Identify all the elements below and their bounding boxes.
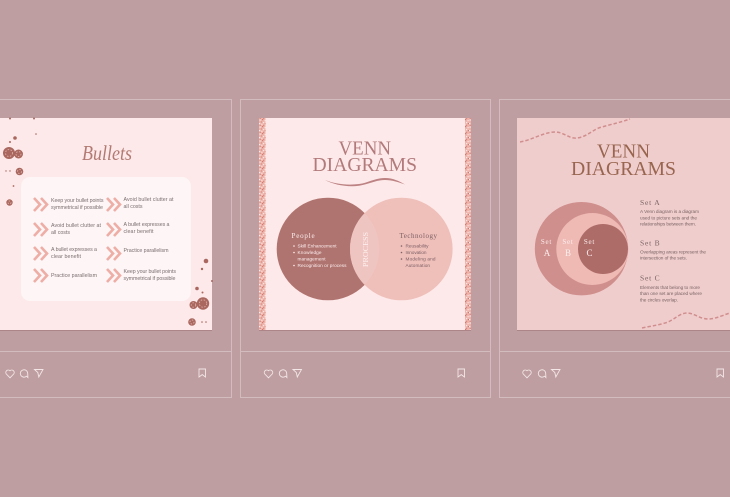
- label: Technology: Reusability: [406, 244, 429, 248]
- venn right circle: [350, 198, 453, 300]
- set B circle: [556, 213, 628, 285]
- bullet text column 2: Keep your bullet points: [124, 269, 176, 275]
- label: People: Skill Enhancement: [298, 244, 337, 248]
- set labels in circles: B: [565, 248, 571, 258]
- post frame: bullets: [0, 100, 232, 398]
- bullet text column 2: all costs: [124, 204, 143, 210]
- text: Set C: than one set are placed where: [640, 291, 702, 296]
- text: Set B: intersection of the sets.: [640, 256, 687, 260]
- glitter splatter bottom right: [188, 259, 213, 326]
- text: Set B: Set B: [640, 238, 660, 248]
- set labels in circles: Set: [562, 238, 574, 246]
- bullet text column 2: Practice parallelism: [124, 248, 169, 254]
- text: Set C: Elements that belong to more: [640, 285, 700, 290]
- bullet text column 1: A bullet expresses a: [51, 247, 97, 253]
- label: PROCESS: PROCESS: [361, 232, 370, 267]
- text: Set A: A Venn diagram is a diagram: [640, 209, 699, 214]
- set labels in circles: A: [544, 248, 551, 258]
- bullet text column 2: [124, 197, 176, 282]
- set labels in circles: C: [586, 248, 593, 258]
- label: Technology: [400, 232, 437, 268]
- bullet text column 1: Practice parallelism: [51, 273, 98, 279]
- glitter border right: [465, 118, 471, 330]
- label: Technology: Automation: [406, 263, 430, 268]
- bullet text column 1: symmetrical if possible: [51, 205, 103, 211]
- post frame: sets: [500, 100, 730, 398]
- bullet text column 1: clear benefit: [51, 254, 82, 260]
- text: Set B: [640, 238, 706, 260]
- glitter border left: [259, 118, 266, 330]
- label: People: Recognition or process: [298, 263, 347, 268]
- set A circle: [535, 202, 628, 295]
- bullet text column 2: symmetrical if possible: [124, 276, 176, 282]
- title: Bullets: Bullets: [82, 141, 132, 165]
- slide: nested sets: [517, 118, 730, 331]
- text: Set C: [640, 274, 702, 302]
- slide: bullets: [0, 118, 213, 331]
- set labels in circles: Set: [584, 238, 595, 246]
- text: Set A: relationships between them.: [640, 222, 696, 226]
- label: People: Knowledge: [298, 250, 322, 255]
- slide: venn diagrams: [259, 118, 471, 331]
- set labels in circles: [541, 238, 595, 258]
- title: VENN: [597, 142, 650, 162]
- title: VENN: [338, 138, 391, 160]
- dashed wave top: [520, 119, 630, 142]
- title: DIAGRAMS: [312, 155, 417, 176]
- set labels in circles: Set: [541, 238, 552, 246]
- chevrons: [34, 198, 120, 282]
- text: Set A: used to picture sets and the: [640, 216, 697, 220]
- venn overlap: [350, 214, 364, 284]
- text: Set C: the circles overlap.: [640, 298, 678, 302]
- dashed wave bottom: [642, 313, 730, 328]
- bullet panel: [21, 177, 191, 301]
- action icons: bullets post: [6, 369, 206, 378]
- bullet text column 1: [51, 198, 104, 279]
- title swoosh: [325, 178, 405, 186]
- text: Set B: Overlapping areas represent the: [640, 250, 706, 254]
- post frame: venn: [240, 100, 490, 398]
- title: [571, 142, 676, 180]
- bullet text column 2: Avoid bullet clutter at: [124, 197, 174, 203]
- title: [312, 138, 417, 176]
- label: People: management: [298, 256, 326, 262]
- bullet text column 1: all costs: [51, 230, 70, 236]
- action icons: sets post: [523, 369, 724, 378]
- title: DIAGRAMS: [571, 159, 676, 180]
- bullet text column 1: Keep your bullet points: [51, 198, 104, 204]
- glitter splatter top left: [3, 118, 37, 206]
- set C circle: [578, 224, 628, 274]
- bullet text column 2: clear benefit: [124, 229, 154, 235]
- bullet text column 1: Avoid bullet clutter at: [51, 223, 102, 229]
- text: Set C: Set C: [640, 274, 660, 282]
- bullet text column 2: A bullet expresses a: [124, 222, 170, 228]
- label: People: People: [292, 232, 315, 240]
- label: Technology: Innovation: [406, 250, 427, 255]
- action icons: venn post: [264, 369, 464, 378]
- label: People: [292, 232, 347, 268]
- label: Technology: Modeling and: [406, 256, 436, 262]
- label: Technology: Technology: [400, 232, 437, 240]
- text: Set A: Set A: [640, 198, 660, 207]
- text: Set A: [640, 198, 699, 226]
- venn left circle: [277, 198, 379, 300]
